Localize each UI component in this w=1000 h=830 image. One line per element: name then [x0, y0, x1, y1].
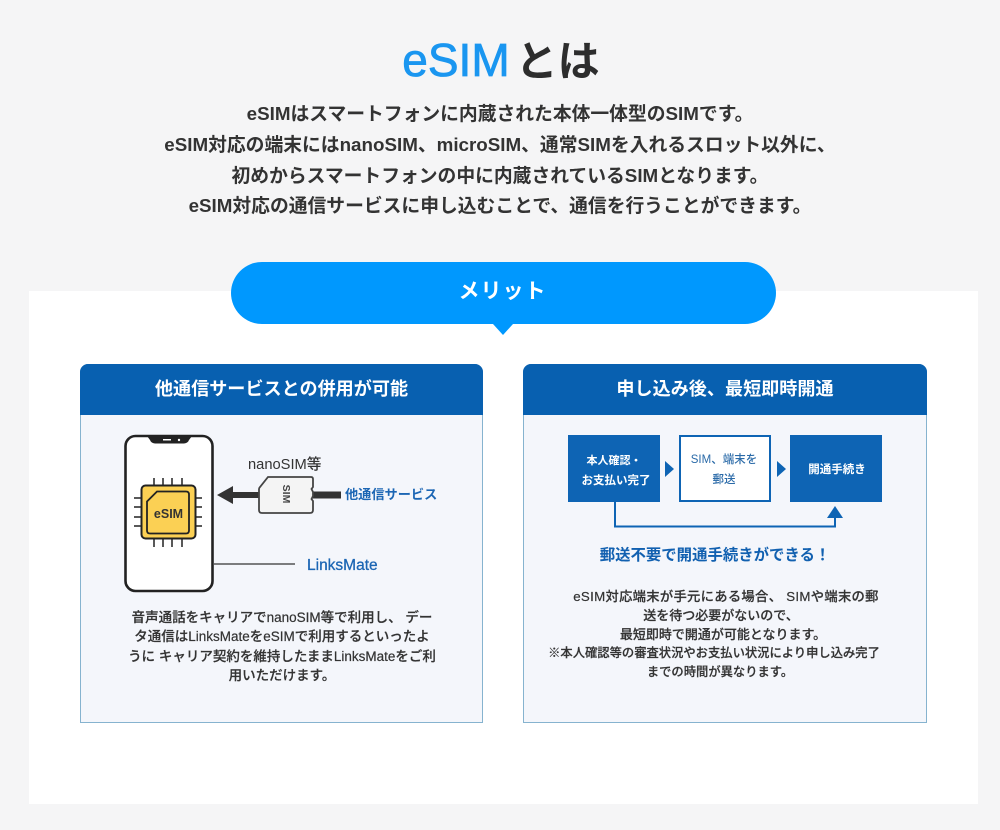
step 3: [790, 435, 882, 502]
bypass arrow: [615, 502, 843, 526]
step 2: 郵送: [712, 472, 736, 486]
step 1: お支払い完了: [582, 473, 650, 487]
card 2 text: [548, 589, 880, 679]
icon: esim chip: eSIM: [154, 507, 183, 521]
label: other service: 他通信サービス: [345, 486, 437, 502]
merit banner: メリット: [458, 280, 546, 303]
card 1 text: うに キャリア契約を維持したままLinksMateをご利: [128, 649, 436, 664]
card 1 heading: [80, 364, 483, 415]
leader line: [214, 563, 295, 565]
merit banner: [231, 262, 776, 335]
card 1 text: 音声通話をキャリアでnanoSIM等で利用し、 デー: [132, 610, 432, 625]
intro text: eSIMはスマートフォンに内蔵された本体一体型のSIMです。: [247, 103, 753, 124]
card 1 text: [128, 610, 436, 683]
panel: card 2: [523, 364, 927, 723]
title: eSIMとは: [402, 34, 600, 86]
step 1: [568, 435, 660, 502]
card 1 text: 用いただけます。: [229, 668, 335, 683]
card 2 text: eSIM対応端末が手元にある場合、 SIMや端末の郵: [573, 589, 879, 604]
icon: esim chip: [134, 478, 202, 547]
icon: phone: [126, 436, 212, 591]
card 2 heading: 申し込み後、最短即時開通: [616, 379, 834, 399]
card 2 subheading: 郵送不要で開通手続きができる！: [600, 547, 830, 564]
intro text: eSIM対応の通信サービスに申し込むことで、通信を行うことができます。: [189, 195, 811, 216]
label: LinksMate: LinksMate: [307, 557, 378, 574]
card 2 text: 送を待つ必要がないので、: [643, 608, 799, 623]
intro text: eSIM対応の端末にはnanoSIM、microSIM、通常SIMを入れるスロット以外に、: [164, 134, 836, 155]
card 1 heading: 他通信サービスとの併用が可能: [155, 379, 408, 399]
arrow to phone: [217, 486, 261, 504]
step 2: SIM、端末を: [691, 452, 757, 466]
icon: sim card: SIM: [280, 485, 292, 504]
card 2 text: 最短即時で開通が可能となります。: [620, 627, 826, 642]
arrow: step 1 to 2: [665, 461, 674, 477]
intro text: 初めからスマートフォンの中に内蔵されているSIMとなります。: [232, 165, 768, 186]
card 2 heading: [523, 364, 927, 415]
step 3: 開通手続き: [808, 462, 866, 476]
step 2: [680, 436, 770, 501]
phone diagram: [124, 434, 437, 592]
panel: merits: [29, 291, 978, 804]
card 2 text: ※本人確認等の審査状況やお支払い状況により申し込み完了: [548, 646, 880, 660]
label: nanoSIM: nanoSIM等: [248, 455, 322, 473]
flow diagram: [568, 435, 882, 528]
step 1: 本人確認・: [586, 453, 642, 467]
panel: card 1: [80, 364, 483, 723]
arrow: step 2 to 3: [777, 461, 786, 477]
card 1 text: タ通信はLinksMateをeSIMで利用するといったよ: [134, 629, 430, 644]
intro text: [164, 103, 836, 216]
icon: sim card: [259, 477, 341, 513]
card 2 text: までの時間が異なります。: [647, 665, 793, 679]
